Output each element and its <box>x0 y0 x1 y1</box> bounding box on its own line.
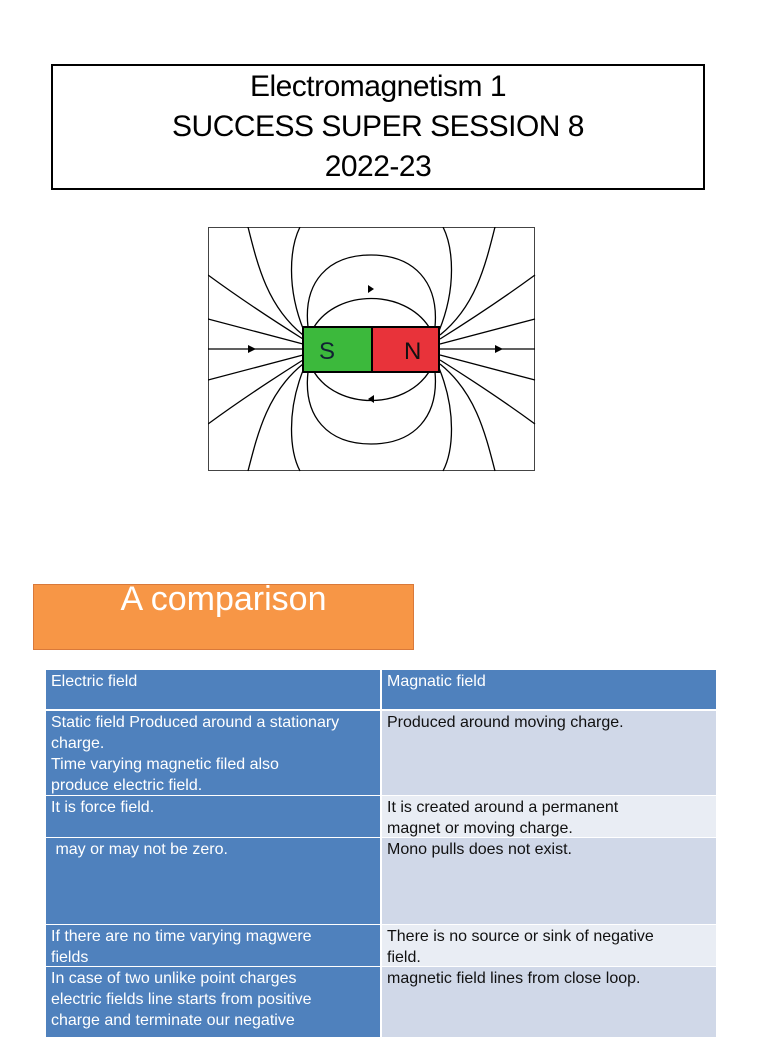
heading: A comparison: A comparison <box>120 580 326 618</box>
table: comparison: If there are no time varying magwere <box>51 928 312 945</box>
diagram: bar magnet field lines <box>208 227 536 472</box>
table: comparison: Produced around moving charge. <box>387 714 624 731</box>
table: comparison: may or may not be zero. <box>55 841 228 858</box>
table: comparison: In case of two unlike point charges <box>51 970 296 987</box>
table: comparison: Static field Produced around a stationary <box>51 714 339 731</box>
table: comparison: magnetic field lines from close loop. <box>387 970 640 987</box>
table: comparison: It is created around a permanent <box>387 799 618 816</box>
table: comparison: It is force field. <box>51 799 154 816</box>
table: comparison: Electric field <box>51 673 137 690</box>
title <box>51 64 705 190</box>
table: comparison: charge. <box>51 735 104 752</box>
diagram: bar magnet field lines: S <box>319 338 335 365</box>
table: comparison: Time varying magnetic filed also <box>51 756 279 773</box>
table: comparison: Mono pulls does not exist. <box>387 841 572 858</box>
table: comparison: fields <box>51 949 88 966</box>
table: comparison: Magnatic field <box>387 673 486 690</box>
title: SUCCESS SUPER SESSION 8 <box>172 110 584 143</box>
heading: A comparison <box>33 584 414 650</box>
table: comparison: produce electric field. <box>51 777 202 794</box>
table: comparison: field. <box>387 949 421 966</box>
table: comparison: There is no source or sink of negative <box>387 928 654 945</box>
table: comparison: electric fields line starts from positive <box>51 991 312 1008</box>
table: comparison: charge and terminate our negative <box>51 1012 295 1029</box>
diagram: bar magnet field lines: N <box>404 338 421 365</box>
table: comparison: magnet or moving charge. <box>387 820 573 837</box>
title: 2022-23 <box>325 150 431 183</box>
title: Electromagnetism 1 <box>250 70 506 103</box>
